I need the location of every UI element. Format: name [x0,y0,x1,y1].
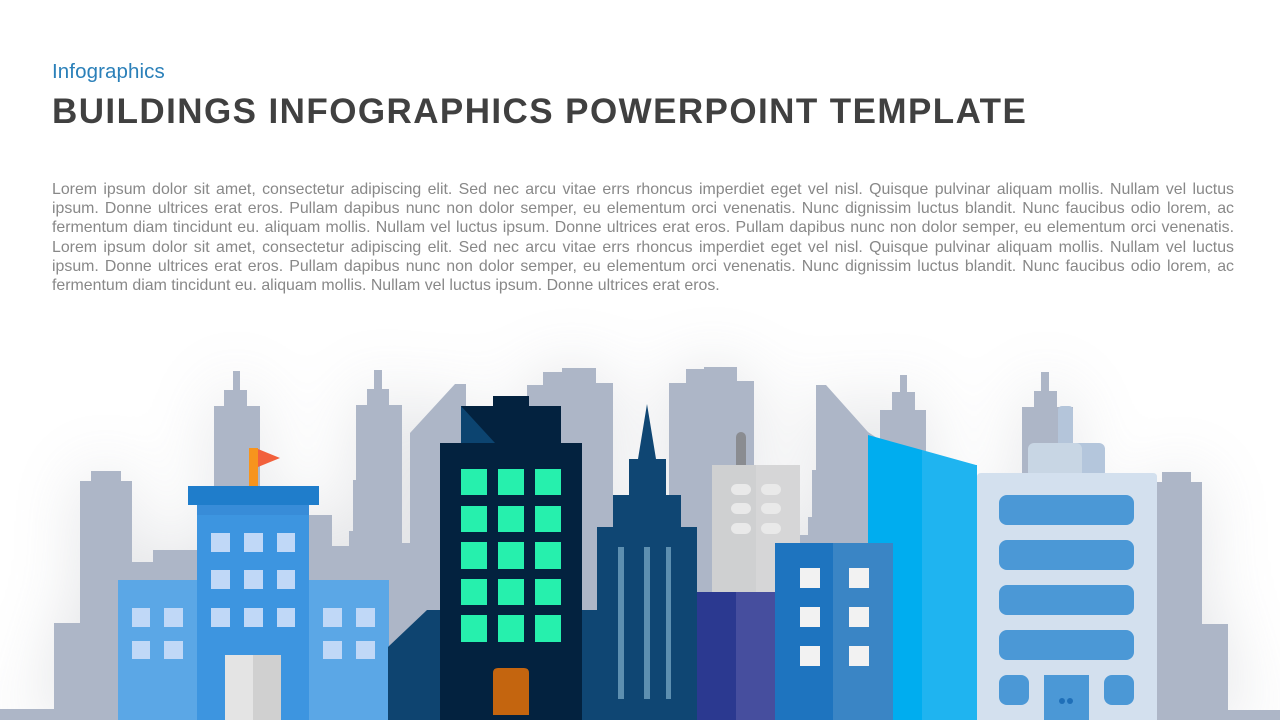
green windows [461,469,561,642]
body text: ipsum. Donne ultrices erat eros. Pullam dapibus nunc non dolor semper, eu elementum orci venenatis. Nunc dignissim luctus blandit. Nunc faucibus odio lorem, ac [52,258,1234,275]
school windows [132,533,375,659]
side wings [118,580,389,720]
body text: Lorem ipsum dolor sit amet, consectetur adipiscing elit. Sed nec arcu vitae errs rhoncus imperdiet eget vel nisl. Quisque pulvinar aliquam mollis. Nullam vel luctus [52,181,1234,198]
building: dark tower with green windows [440,396,582,720]
white windows [800,568,869,666]
building: blue school with flag [118,448,389,720]
title: BUILDINGS INFOGRAPHICS POWERPOINT TEMPLATE [52,92,1027,131]
background skyline silhouette [0,367,1280,720]
kicker label: Infographics [52,60,165,83]
body text: fermentum diam tincidunt eu. aliquam mollis. Nullam vel luctus ipsum. Donne ultrices erat eros. Pullam dapibus nunc non dolor semper, eu elementum orci venenatis. [52,219,1234,236]
building: low navy annex [388,610,440,720]
roof facet [461,406,495,443]
school door [225,655,281,720]
oval windows [731,484,781,534]
body text: ipsum. Donne ultrices erat eros. Pullam dapibus nunc non dolor semper, eu elementum orci venenatis. Nunc dignissim luctus blandit. Nunc faucibus odio lorem, ac [52,200,1234,217]
body text [52,181,1234,294]
antenna [736,432,746,472]
building: spire tower [582,404,697,720]
body text: fermentum diam tincidunt eu. aliquam mollis. Nullam vel luctus ipsum. Donne ultrices erat eros. [52,277,720,294]
roof slab [188,486,319,505]
body text: Lorem ipsum dolor sit amet, consectetur adipiscing elit. Sed nec arcu vitae errs rhoncus imperdiet eget vel nisl. Quisque pulvinar aliquam mollis. Nullam vel luctus [52,239,1234,256]
building: purple block [697,592,775,720]
building: blue block with white windows [775,543,893,720]
building: grey office with antenna [712,432,800,595]
flag [249,448,280,486]
door handles [1059,698,1073,704]
building: bright blue glass tower [868,435,977,720]
orange door [493,668,529,715]
floor bands [999,495,1134,720]
rooftop units [1028,406,1105,478]
soft shadow behind skyline [0,367,1280,720]
building: pale blue office [977,406,1157,720]
central tower [197,505,309,720]
spire stripes [618,547,671,699]
